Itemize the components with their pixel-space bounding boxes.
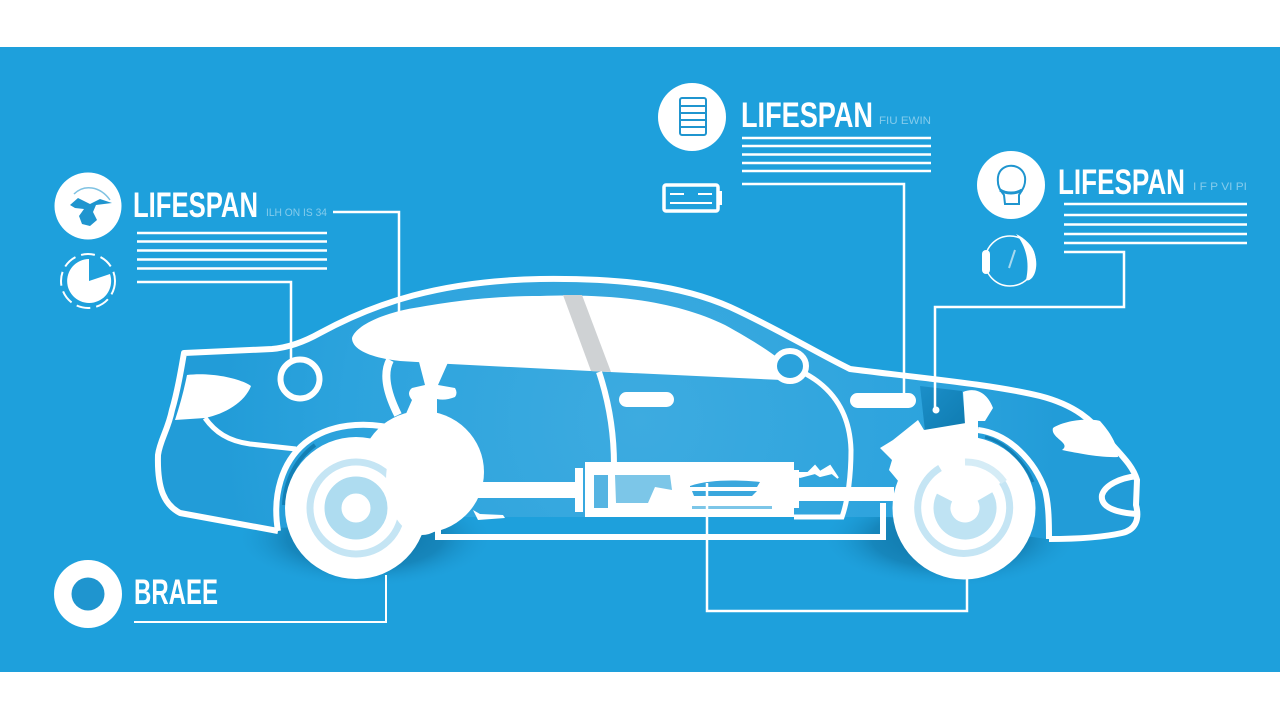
nose grille [1102,476,1138,514]
rear wheel arch gap [284,445,315,505]
front brake disc [880,420,970,500]
window pillar [563,295,611,372]
heading: LIFESPAN [1058,163,1185,202]
icon: bulb [977,151,1045,219]
rear wheel [285,425,458,579]
callout: right lifespan [932,151,1247,414]
headlight [1053,420,1118,457]
front wheel arch [978,430,1049,539]
icon: battery [658,83,726,151]
small caption: FIU EWIN [879,115,931,127]
text lines [742,138,931,171]
rear white hub blob [360,411,484,533]
ground shadows under wheels [235,488,1080,588]
text lines [1064,204,1247,243]
front wheel [892,436,1036,580]
rear wheel arch [276,425,392,531]
rear axle shaft [470,482,580,498]
door line centre [599,372,614,465]
rear trunk line [205,418,296,449]
dark engine bay [920,386,966,431]
car illustration [158,279,1138,580]
door line front [794,374,851,517]
rear light [175,374,251,420]
icon: pie gauge [61,254,115,308]
sill line [438,503,883,537]
heading: LIFESPAN [133,186,258,225]
small engine bits [798,466,838,478]
icon: small battery [664,185,722,211]
side mirror [774,351,806,381]
heading: BRAEE [134,573,218,612]
leader line to engine bay [935,252,1124,410]
rear tail lamp circle [280,360,320,398]
rear skirt [473,510,505,520]
small caption: ILH ON IS 34 [266,207,327,219]
callout: left top lifespan [54,172,399,360]
leader end dot [932,406,940,414]
leader line to tail lamp [137,282,291,360]
front wheel arch gap [985,437,1033,482]
small caption: I F P VI PI [1193,181,1247,193]
icon: gauge disc [982,234,1036,286]
car body outline [158,279,1137,539]
icon: brake [54,560,122,628]
callout: brake [54,560,386,628]
heading: LIFESPAN [741,96,873,135]
icon: engine [54,172,122,240]
front suspension [963,390,993,440]
leader line to roof [333,212,399,312]
text lines [137,233,327,268]
battery module [575,462,799,517]
door handle centre [619,392,674,407]
leader line to rear wheel [134,575,386,622]
connector between battery and front wheel [707,483,967,611]
leader line to door handle [742,184,904,394]
rear suspension [405,358,456,418]
callout: battery lifespan [658,83,931,394]
front axle shaft [794,487,894,501]
windows [352,295,782,380]
car body fill [158,279,1137,539]
door handle front [850,393,916,408]
rear quarter window curve [386,360,398,415]
